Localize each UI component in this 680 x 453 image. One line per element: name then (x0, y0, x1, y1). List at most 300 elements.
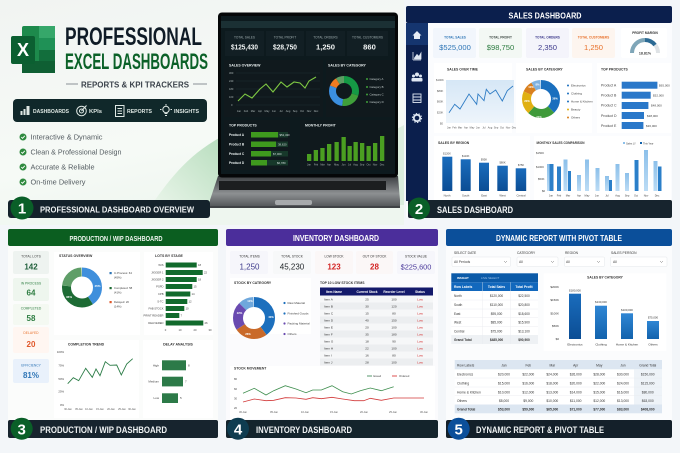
dark line chart: sales overview: Jun (272, 109, 277, 113)
dark kpi cards: 1,250 (316, 42, 335, 52)
icon: target (77, 106, 86, 116)
table: top 10 low stock items: 100 (391, 326, 397, 330)
header: production wip dashboard (8, 229, 218, 246)
line chart: stock movement: 20 (234, 406, 237, 410)
kpi cards row: LOW STOCK (324, 254, 344, 258)
kpi cards column (13, 251, 49, 383)
kpi cards: TOTAL SALES (444, 36, 466, 40)
bar chart: lots by stage: PSPD (156, 284, 164, 288)
kpi cards row: 123 (327, 262, 341, 272)
donut chart: sales by category: 20% (524, 99, 530, 103)
bar chart: lots by stage: FAB STOCK (148, 306, 164, 310)
table: top 10 low stock items: 16 (365, 354, 369, 358)
dark bar chart: monthly profit: Apr (327, 164, 331, 166)
table: top 10 low stock items: Reorder Level (383, 290, 405, 294)
bar chart: delay analysis: Medium (148, 380, 159, 384)
donut chart: status overview (54, 252, 140, 335)
bar chart: lots by stage: DELIVERED (148, 321, 164, 325)
kpi cards row: TOTAL STOCK (281, 254, 304, 258)
table: top 10 low stock items: Item I (324, 354, 332, 358)
pivot table: sales by region: North (454, 294, 462, 298)
pivot table: sales by region: Grand Total (454, 338, 472, 342)
kpi cards column: DELAYED (23, 331, 39, 335)
pivot table: monthly by category: $20,000 (570, 382, 582, 386)
table: top 10 low stock items: 120 (391, 304, 397, 308)
dark line chart: sales overview: Feb (244, 109, 249, 113)
bar chart: sales by category (544, 273, 666, 351)
bar chart: sales by category: $180,000 (569, 288, 581, 292)
pivot table: sales by region: Total Profit (515, 285, 533, 289)
dark line chart: sales overview: Dec (314, 109, 319, 113)
dark line chart: sales overview: Jul (279, 109, 283, 113)
pivot table: sales by region: $13,100 (518, 330, 530, 334)
table: top 10 low stock items: 80 (392, 354, 396, 358)
donut chart: stock by category: Finished Goods (288, 312, 309, 316)
dark bar chart: monthly profit: MONTHLY PROFIT (305, 124, 337, 128)
line chart: completion trend: 15-Jan (96, 408, 104, 411)
pivot table: monthly by category: $18,000 (546, 382, 558, 386)
filter dropdowns: All Periods (454, 260, 471, 264)
kpi cards column: 58 (27, 314, 36, 323)
icon: chart (413, 52, 421, 60)
donut chart: stock by category: Packing Material (288, 322, 310, 326)
table: top 10 low stock items (320, 281, 433, 366)
line chart: sales over time: $80K (437, 89, 443, 93)
kpi cards: TOTAL CUSTOMERS (578, 36, 609, 40)
pivot table: monthly by category (455, 360, 662, 413)
pivot table: monthly by category: Mar (549, 364, 556, 368)
table: top 10 low stock items: Item H (324, 346, 333, 350)
bar chart: delay analysis: 5 (180, 396, 182, 400)
line chart: sales over time: Oct (500, 126, 504, 130)
donut chart: stock by category: 26% (245, 332, 251, 336)
donut chart: stock by category: STOCK BY CATEGORY (234, 281, 272, 285)
pivot table: monthly by category: Electronics (457, 372, 473, 376)
bar chart: sales by region: South (462, 194, 470, 198)
table: top 10 low stock items: 20 (365, 326, 369, 330)
line chart: completion trend: 100% (57, 350, 65, 354)
donut chart: status overview: (45%) (114, 276, 122, 280)
donut chart: sales by category (516, 63, 593, 133)
bar list: top products: $52,000 (653, 94, 664, 98)
panel: dynamic report with pivot table (446, 229, 672, 440)
donut chart: status overview: In Process: 64 (114, 271, 132, 275)
table: top 10 low stock items: 100 (391, 360, 397, 364)
dark bar chart: monthly profit: Aug (353, 164, 358, 166)
table: top 10 low stock items: 80 (392, 312, 396, 316)
gauge: profit margin: PROFIT MARGIN (632, 31, 658, 35)
laptop (210, 12, 400, 208)
table: top 10 low stock items: 180 (391, 332, 397, 336)
bar chart: sales by category: $75,000 (648, 316, 658, 320)
bar chart: sales by category: $200K (550, 285, 559, 289)
pivot table: monthly by category: $10,000 (498, 390, 510, 394)
bar list: top products (597, 63, 671, 133)
dark bar list: top products: TOP PRODUCTS (229, 124, 257, 128)
table: top 10 low stock items: 90 (392, 340, 396, 344)
filter dropdowns: All (519, 260, 523, 264)
kpi cards row: 45,230 (280, 262, 305, 272)
pivot table: monthly by category: Feb (525, 364, 531, 368)
donut chart: stock by category: 12% (247, 299, 253, 303)
line chart: stock movement (230, 366, 435, 419)
pivot table: monthly by category: Jan (501, 364, 507, 368)
table: top 10 low stock items: Low (417, 340, 424, 344)
dark line chart: sales overview: Jan (237, 109, 242, 113)
pivot table: sales by region: Central (454, 330, 465, 334)
pivot table: sales by region: West (454, 320, 461, 324)
bar list: top products: $48,000 (651, 104, 662, 108)
bar chart: monthly sales comparison (534, 136, 671, 200)
dark bar chart: monthly profit: Dec (380, 164, 385, 166)
bar chart: sales by region: West (499, 194, 506, 198)
table: top 10 low stock items: Item C (324, 312, 334, 316)
dark line chart: sales overview: 180 (229, 87, 234, 91)
line chart: stock movement: 25-Jan (389, 410, 398, 414)
pivot table: monthly by category: $26,000 (570, 372, 582, 376)
dark bar list: top products: Product B (229, 142, 245, 146)
pivot table: monthly by category: $28,000 (593, 372, 605, 376)
dark line chart: sales overview: 300 (229, 71, 234, 75)
dark bar chart: monthly profit: Jun (341, 164, 346, 166)
panel: sales dashboard (406, 6, 672, 220)
pivot table: monthly by category: Row Labels (457, 364, 475, 368)
donut chart: sales by category: 24% (536, 115, 542, 119)
line chart: stock movement: 10-Jan (301, 410, 310, 414)
donut chart: sales by category: 38% (552, 96, 558, 100)
dark line chart: sales overview: Apr (258, 109, 262, 113)
icon: light bulb (160, 104, 172, 116)
kpi cards column: 142 (24, 262, 38, 272)
pivot table: monthly by category: Home & Kitchen (457, 390, 481, 394)
donut chart: stock by category: 40% (268, 315, 274, 319)
bar list: top products: Product E (601, 124, 617, 128)
dark kpi cards: TOTAL SALES (234, 36, 255, 40)
panel: production wip dashboard (8, 229, 218, 440)
pivot table: sales by region: $22,500 (518, 294, 530, 298)
table: top 10 low stock items: Status (415, 290, 425, 294)
filter dropdowns (452, 251, 667, 266)
table: top 10 low stock items: Item E (324, 326, 333, 330)
bar chart: lots by stage: JIGGER 2 (151, 278, 164, 282)
bar chart: delay analysis: High (153, 364, 159, 368)
dark line chart: sales overview: Aug (286, 109, 291, 113)
kpi cards: $98,750 (487, 43, 514, 52)
pivot table: monthly by category: Jun (620, 364, 626, 368)
header: inventory dashboard (226, 229, 438, 246)
kpi cards: TOTAL PROFIT (489, 36, 512, 40)
bar chart: sales by category: SALES BY CATEGORY (587, 276, 624, 280)
filter dropdowns: CATEGORY (517, 251, 536, 255)
bar chart: lots by stage: 7 (180, 314, 182, 318)
dark donut: sales by category (326, 60, 394, 117)
line chart: completion trend: 30-Jan (128, 408, 136, 411)
icon: table (413, 94, 421, 102)
line chart: stock movement: 15-Jan (330, 410, 339, 414)
bar chart: sales by category: $150K (550, 298, 559, 302)
line chart: sales over time: $100K (436, 78, 444, 82)
table: top 10 low stock items: 40 (365, 318, 369, 322)
pivot table: monthly by category: $9,000 (523, 399, 534, 403)
kpi cards row: STOCK VALUE (405, 254, 427, 258)
laptop screen (218, 12, 398, 178)
table: top 10 low stock items: 150 (391, 318, 397, 322)
caption bar 1 (8, 196, 210, 220)
table: top 10 low stock items: Low (417, 326, 424, 330)
table: top 10 low stock items: Low (417, 332, 424, 336)
donut chart: stock by category: 22% (237, 311, 243, 315)
donut chart: sales by category: Electronics (571, 84, 586, 88)
table: top 10 low stock items: Low (417, 346, 424, 350)
table: top 10 low stock items: Item Name (326, 290, 342, 294)
feature pill: DASHBOARDS (33, 109, 69, 115)
dark line chart: sales overview: Mar (251, 109, 255, 113)
bar chart: lots by stage: S-TC (157, 300, 164, 304)
table: top 10 low stock items: 15 (365, 312, 369, 316)
pivot table: monthly by category: $13,000 (617, 399, 629, 403)
dark kpi cards: 860 (363, 42, 376, 52)
bar chart: lots by stage: 10 (186, 306, 189, 310)
feature checklist: Interactive & Dynamic (30, 132, 103, 142)
bar chart: lots by stage: LOTS BY STAGE (155, 254, 184, 258)
pivot table: monthly by category: $24,000 (617, 382, 629, 386)
feature pill: INSIGHTS (174, 109, 199, 115)
donut chart: status overview: 36% (66, 295, 72, 299)
pivot table: monthly by category: $22,000 (593, 382, 605, 386)
pivot table: sales by region: Total Sales (488, 285, 505, 289)
pivot table: monthly by category: $10,000 (546, 399, 558, 403)
pivot table: monthly by category: Grand Total (457, 408, 475, 412)
bar chart: sales by region: $95K (481, 158, 487, 162)
kpi cards: 1,250 (584, 43, 603, 52)
line chart: sales over time: Apr (464, 126, 468, 130)
bar chart: lots by stage (144, 252, 213, 335)
dark kpi cards: TOTAL CUSTOMERS (352, 36, 383, 40)
line chart: sales over time: Aug (488, 126, 493, 130)
donut chart: stock by category (230, 278, 311, 336)
pivot table: monthly by category: $16,000 (617, 390, 629, 394)
feature checklist: Clean & Professional Design (30, 148, 122, 156)
bar chart: sales by region: $80K (499, 160, 506, 164)
feature checklist: On-time Delivery (30, 178, 86, 186)
dark line chart: sales overview: 100 (229, 95, 234, 99)
table: top 10 low stock items: Item D (324, 318, 334, 322)
table: top 10 low stock items: 25 (365, 298, 369, 302)
line chart: completion trend (54, 340, 139, 418)
kpi cards column: TOTAL LOTS (21, 254, 42, 258)
line chart: sales over time: Dec (512, 126, 517, 130)
donut chart: sales by category: Home & Kitchen (571, 100, 593, 104)
table: top 10 low stock items: Low (417, 312, 424, 316)
kpi cards (433, 28, 615, 58)
bar chart: monthly sales comparison: This Year (643, 142, 654, 145)
table: top 10 low stock items: TOP 10 LOW STOCK ITEMS (320, 281, 365, 285)
pivot table: sales by region: $75,000 (491, 330, 502, 334)
icon: report (116, 106, 124, 116)
icon: excel logo: X (17, 40, 29, 60)
dark donut: sales by category: Category D (370, 100, 384, 104)
bar chart: lots by stage: 18 (198, 278, 202, 282)
table: top 10 low stock items: Low (417, 304, 424, 308)
filter dropdowns: SELECT DATE (454, 251, 477, 255)
line chart: stock movement: Issued (373, 374, 382, 378)
bar chart: delay analysis: Low (153, 396, 160, 400)
line chart: sales over time: Feb (452, 126, 457, 130)
pivot table: monthly by category: $22,000 (522, 372, 534, 376)
dark bar chart: monthly profit (300, 120, 394, 170)
bar chart: lots by stage: PRINT READER (144, 314, 164, 318)
bar chart: lots by stage: 12 (188, 300, 192, 304)
title: professional: PROFESSIONAL (65, 23, 202, 51)
table: top 10 low stock items: Low (417, 298, 424, 302)
bar chart: lots by stage: 10 (178, 328, 182, 332)
filter dropdowns: SALES PERSON (611, 251, 637, 255)
table: top 10 low stock items: Item B (324, 304, 333, 308)
pivot table: monthly by category: $150,000 (641, 372, 655, 376)
pivot table: monthly by category: Clothing (457, 382, 469, 386)
caption bar 2 (408, 198, 672, 220)
pivot table: sales by region: $485,000 (490, 338, 503, 342)
line chart: completion trend: 25% (58, 390, 65, 394)
bar chart: monthly sales comparison: Oct (634, 194, 638, 198)
table: top 10 low stock items: Low (417, 354, 424, 358)
dark line chart: sales overview (224, 60, 323, 117)
dark bar list: top products: $52,430 (280, 133, 290, 137)
header: sales dashboard (406, 6, 672, 23)
line chart: sales over time: SALES OVER TIME (447, 68, 479, 72)
line chart: stock movement: STOCK MOVEMENT (234, 366, 267, 370)
line chart: sales over time: Jun (476, 126, 481, 130)
caption bar 4 (226, 418, 438, 440)
dark bar list: top products: Product D (229, 161, 245, 165)
table: top 10 low stock items: Current Stock (356, 290, 378, 294)
dark line chart: sales overview: SALES OVERVIEW (229, 64, 261, 68)
dark bar chart: monthly profit: Nov (373, 164, 378, 166)
dark bar chart: monthly profit: Feb (314, 164, 319, 166)
bar list: top products: TOP PRODUCTS (601, 68, 629, 72)
bar chart: monthly sales comparison: Jun (595, 194, 600, 198)
caption bar 2: 2 (415, 201, 423, 218)
pivot table: monthly by category: $24,000 (546, 372, 558, 376)
donut chart: status overview: (41%) (114, 290, 122, 294)
bar chart: lots by stage: CPB (158, 292, 164, 296)
pivot table: monthly by category: $53,000 (498, 408, 510, 412)
dark kpi cards: TOTAL ORDERS (313, 36, 338, 40)
pivot table: sales by region: $18,600 (518, 312, 530, 316)
pivot table: sales by region: LIVE SELECT (481, 276, 500, 280)
bar chart: monthly sales comparison: $50K (538, 177, 545, 181)
dark kpi cards (225, 31, 388, 56)
pivot table: sales by region: $110,000 (490, 303, 503, 307)
bar list: top products: Product A (601, 84, 617, 88)
feature checklist (20, 132, 122, 186)
kpi cards: TOTAL ORDERS (535, 36, 560, 40)
line chart: completion trend: 75% (58, 364, 65, 368)
pivot table: monthly by category: $63,000 (642, 399, 654, 403)
dark kpi cards: $125,430 (231, 42, 258, 52)
bar chart: monthly sales comparison: Aug (615, 194, 620, 198)
gauge: profit margin (621, 28, 667, 58)
bar chart: sales by category: $50K (552, 324, 559, 328)
caption bar 2: SALES DASHBOARD (437, 205, 513, 215)
kpi cards row: 28 (370, 262, 379, 272)
kpi cards: 2,350 (538, 43, 557, 52)
donut chart: status overview: Completed: 58 (114, 286, 133, 290)
pivot table: sales by region: $95,000 (491, 312, 502, 316)
line chart: sales over time: Jan (447, 126, 452, 130)
pivot table: monthly by category: $8,000 (499, 399, 509, 403)
donut chart: sales by category: SALES BY CATEGORY (526, 68, 563, 72)
pivot table: sales by region: $90,900 (518, 338, 530, 342)
pivot table: monthly by category: $80,000 (642, 390, 654, 394)
line chart: stock movement: Ordered (399, 374, 410, 378)
bar chart: sales by category: Home & Kitchen (616, 342, 638, 346)
dark line chart: sales overview: 240 (229, 79, 234, 83)
filter dropdowns: All (566, 260, 570, 264)
bar chart: lots by stage: 14 (192, 292, 195, 296)
header: dynamic report with pivot table (446, 229, 672, 246)
dark bar chart: monthly profit: Jul (348, 164, 352, 166)
bar chart: monthly sales comparison: Jul (605, 194, 609, 198)
pivot table: sales by region: $20,800 (518, 303, 530, 307)
sidebar navigation (406, 23, 428, 201)
icon: settings (412, 113, 422, 123)
pivot table: sales by region: $15,900 (518, 320, 530, 324)
bar chart: lots by stage: 20 (194, 328, 197, 332)
bar chart: delay analysis: 7 (185, 380, 187, 384)
header: sales dashboard: SALES DASHBOARD (508, 10, 582, 20)
pivot table: monthly by category: $59,000 (522, 408, 534, 412)
bar chart: sales by region: East (481, 194, 487, 198)
dark bar list: top products (224, 120, 290, 170)
pivot table: monthly by category: $65,000 (546, 408, 558, 412)
line chart: stock movement: 05-Jan (270, 410, 279, 414)
donut chart: sales by category: Others (571, 116, 581, 120)
caption bar 5 (446, 418, 672, 440)
pivot table: monthly by category: $77,000 (593, 408, 605, 412)
bar chart: sales by category: $100K (550, 312, 559, 316)
bar chart: lots by stage: 0 (165, 328, 167, 332)
donut chart: sales by category: Beauty (571, 108, 581, 112)
bar chart: sales by category: Electronics (567, 342, 583, 346)
pivot table: monthly by category: $83,000 (617, 408, 629, 412)
dark donut: sales by category: Category A (370, 77, 383, 81)
dark bar chart: monthly profit: Mar (320, 164, 325, 166)
pivot table: monthly by category: $11,000 (570, 399, 582, 403)
bar chart: sales by category: Clothing (595, 342, 607, 346)
line chart: sales over time: Mar (458, 126, 462, 130)
pivot table: monthly by category: $15,000 (498, 382, 510, 386)
line chart: completion trend: 20-Jan (107, 408, 115, 411)
header: inventory dashboard: INVENTORY DASHBOARD (293, 234, 379, 243)
dark donut: sales by category: Category C (370, 92, 384, 96)
pivot table: monthly by category: Apr (573, 364, 579, 368)
pivot table: sales by region: $85,000 (491, 320, 502, 324)
line chart: sales over time: Jul (482, 126, 486, 130)
donut chart: sales by category: Clothing (571, 92, 582, 96)
pivot table: monthly by category: May (596, 364, 603, 368)
dark line chart: sales overview: Sep (293, 109, 298, 113)
feature pill: REPORTS (127, 109, 152, 115)
pivot table: monthly by category: $16,000 (522, 382, 534, 386)
pivot table: monthly by category: Grand Total (639, 364, 656, 368)
kpi cards column: 20 (27, 340, 36, 349)
caption bar 3: PRODUCTION / WIP DASHBOARD (40, 425, 167, 435)
caption bar 5: 5 (455, 422, 463, 438)
bar chart: sales by region: Central (516, 194, 526, 198)
caption bar 3: 3 (18, 422, 26, 438)
bar chart: lots by stage: 15 (194, 284, 197, 288)
